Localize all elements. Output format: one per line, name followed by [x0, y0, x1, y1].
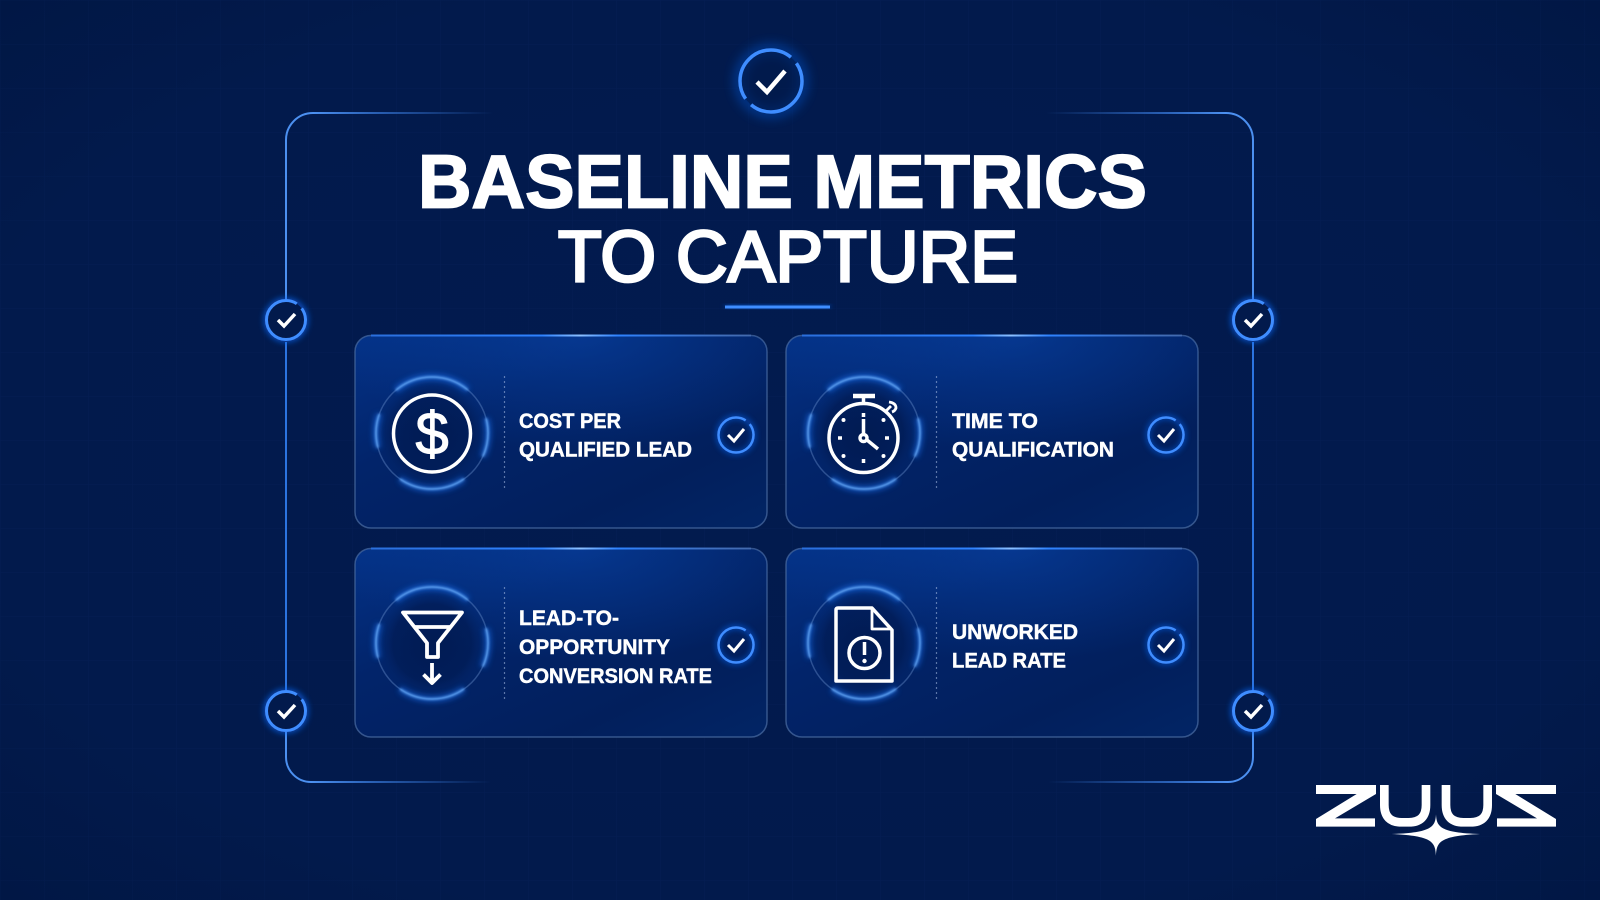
metric label: LEAD-TO- [519, 607, 619, 630]
side check: upper left [266, 300, 306, 340]
metric label: COST PER [519, 410, 621, 433]
metric label: QUALIFIED LEAD [519, 438, 692, 462]
check [1148, 627, 1184, 663]
panel: time to qualification [786, 334, 1198, 528]
check [718, 627, 754, 663]
title underline [725, 305, 830, 308]
icon: dollar in glowing circle: $ [415, 400, 449, 467]
panel: cost per qualified lead [355, 334, 767, 528]
metric label: CONVERSION RATE [519, 665, 712, 688]
panel: lead-to-opportunity conversion rate [355, 548, 767, 737]
metric label: QUALIFICATION [952, 438, 1114, 462]
side check: lower right [1233, 691, 1273, 731]
divider [504, 587, 506, 700]
metric label: TIME TO [952, 410, 1038, 433]
metric label: OPPORTUNITY [519, 636, 670, 659]
title [418, 140, 1147, 298]
divider [504, 376, 506, 490]
logo: ZUUS [1316, 785, 1556, 856]
icon: funnel in glowing circle [376, 587, 488, 699]
outer frame [286, 112, 1253, 783]
panel: unworked lead rate [786, 548, 1198, 737]
icon: document with alert in glowing circle [808, 587, 920, 699]
metric label: UNWORKED [952, 621, 1078, 644]
side check: upper right [1233, 300, 1273, 340]
icon: dollar in glowing circle [376, 377, 488, 489]
side check: lower left [266, 691, 306, 731]
top check badge [739, 49, 803, 113]
check [1148, 417, 1184, 453]
metric label: LEAD RATE [952, 650, 1066, 672]
divider [936, 376, 938, 490]
divider [936, 587, 938, 700]
icon: stopwatch in glowing circle [808, 377, 920, 489]
title: BASELINE METRICS [418, 140, 1147, 224]
title: TO CAPTURE [558, 218, 1018, 298]
check [718, 417, 754, 453]
